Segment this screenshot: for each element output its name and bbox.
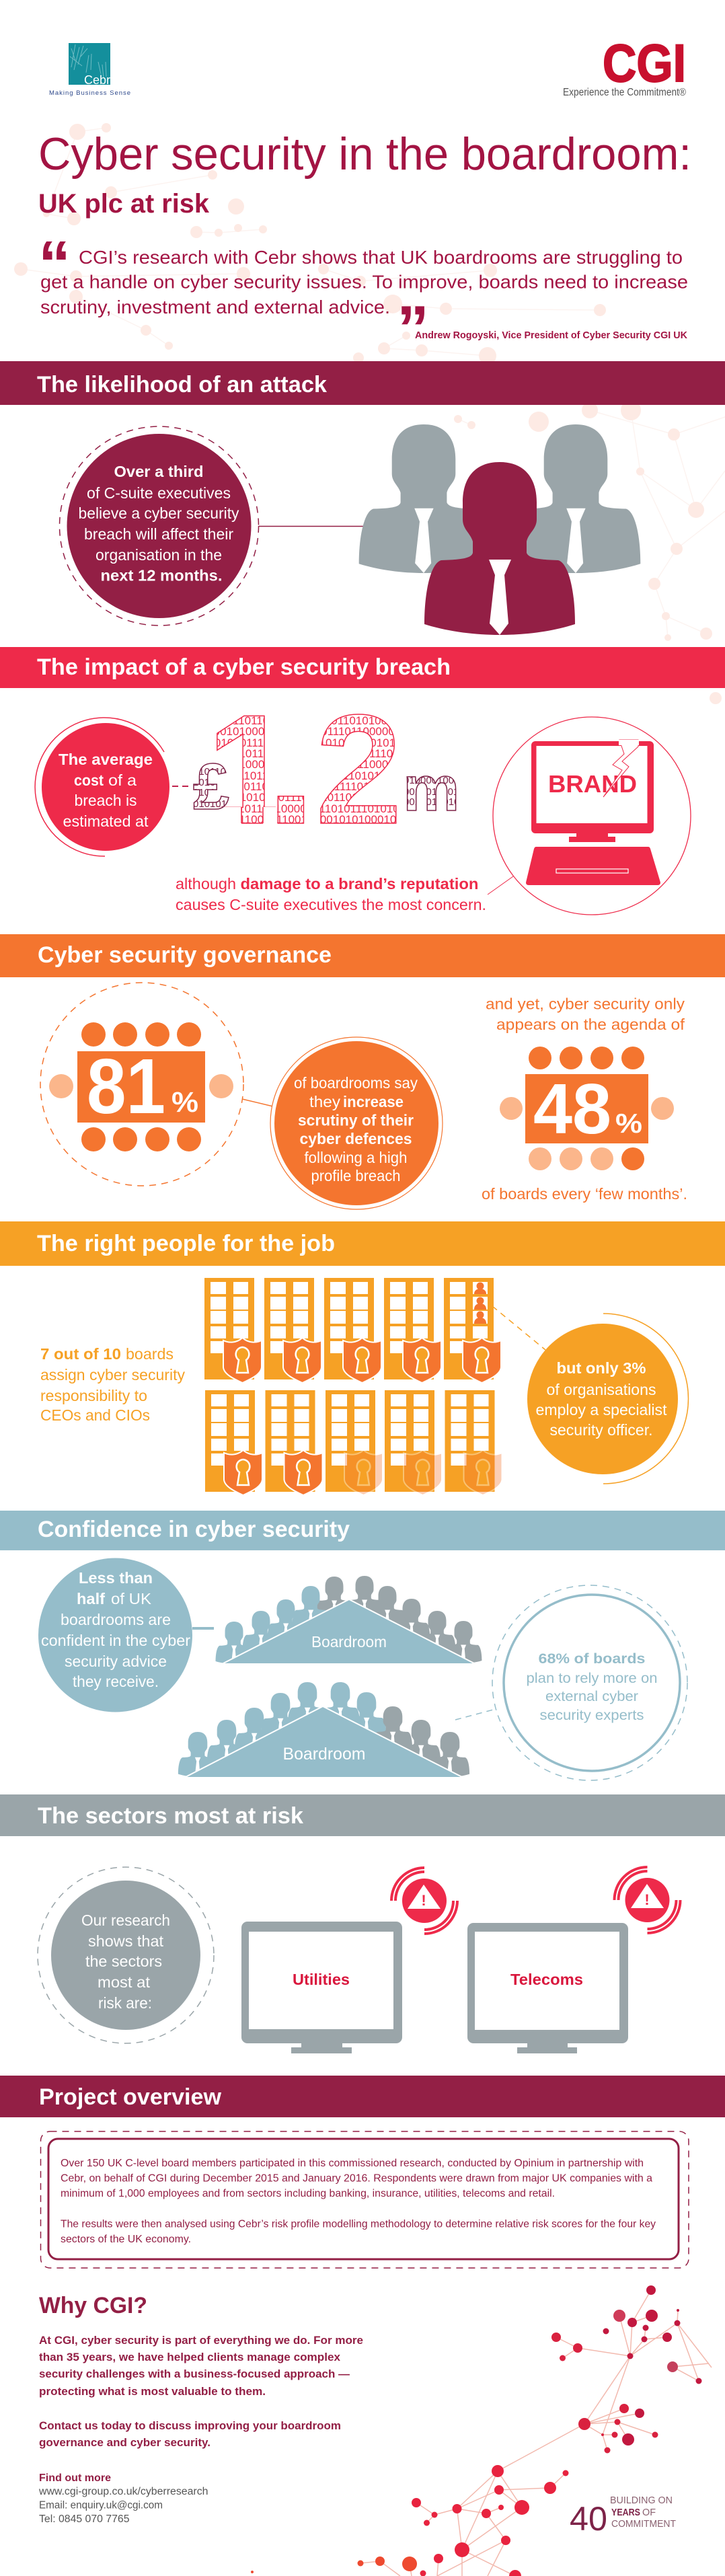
quote: “ (38, 228, 71, 300)
figure: £1.2m in binary: 011010101101101001010101110111001011100101110 (202, 747, 479, 760)
caption: brand reputation: damage to a brand’s reputation (241, 875, 479, 893)
callout: our research: most at (98, 1973, 151, 1991)
quote (38, 228, 688, 365)
text: 7 out of 10 boards (40, 1345, 185, 1424)
illustration: red network (251, 2285, 712, 2576)
text block: why CGI body: Contact us today to discuss improving your boardroom (39, 2420, 341, 2432)
callout: boardrooms increase scrutiny: scrutiny of their (298, 1111, 414, 1129)
section header: confidence (0, 1511, 725, 1550)
callout: our research: shows that (88, 1932, 164, 1950)
text: 7 out of 10 boards: assign cyber security (40, 1366, 185, 1384)
panel: project overview box (40, 2131, 689, 2268)
figure: £1.2m in binary: 1010011 (193, 777, 231, 788)
icon: alert telecoms: ! (644, 1891, 650, 1908)
callout: over a third (59, 426, 258, 626)
callout: boardrooms increase scrutiny: of boardrooms say (294, 1074, 418, 1092)
callout: boardrooms increase scrutiny: following a high (304, 1149, 408, 1166)
logo: Cebr (49, 43, 130, 97)
figure: £1.2m in binary: 2 (315, 683, 402, 857)
section header: likelihood (0, 361, 725, 405)
figure: £1.2m in binary: 0010010010010 (404, 796, 476, 808)
panel: governance (40, 983, 687, 1209)
heading: Why CGI: Why CGI? (39, 2293, 147, 2318)
callout: average cost: of a (108, 771, 137, 789)
figure: £1.2m in binary: 0100001000010 (404, 775, 476, 786)
callout: 68% of boards: 68% of boards (538, 1651, 646, 1667)
stat: 48%: of boards every ‘few months’. (482, 1185, 687, 1203)
logo: CGI (563, 33, 687, 98)
panel: project overview box: The results were then analysed using Cebr’s risk profile modelling methodology to determine relative risk scores for the four key (61, 2218, 656, 2230)
callout: less than half: confident in the cyber (41, 1632, 190, 1649)
section header: sectors (0, 1794, 725, 1836)
logo: CGI: Experience the Commitment® (563, 87, 687, 98)
text: 7 out of 10 boards: CEOs and CIOs (40, 1406, 150, 1424)
logo: building on 40 years of commitment (570, 2495, 676, 2538)
callout: less than half: boardrooms are (61, 1611, 171, 1628)
caption: brand reputation (176, 875, 486, 913)
section header: sectors: The sectors most at risk (38, 1803, 303, 1829)
monitor: utilities: Utilities (293, 1971, 350, 1988)
stat: 48%: and yet, cyber security only (486, 995, 685, 1013)
callout: over a third: believe a cyber security (78, 504, 239, 522)
panel: project overview box: minimum of 1,000 employees and from sectors including banking, insurance, utilities, telecoms and retail. (61, 2188, 555, 2199)
icon: broken brand monitor: BRAND (548, 770, 637, 798)
callout: 68% of boards: plan to rely more on (526, 1670, 658, 1686)
connector dash (172, 786, 190, 787)
text block: why CGI body: governance and cyber security. (39, 2437, 211, 2449)
section header: project overview: Project overview (39, 2084, 222, 2110)
figure: £1.2m in binary: £ (193, 750, 229, 823)
panel: sectors most at risk (38, 1867, 681, 2053)
figure: £1.2m in binary: 1 (206, 683, 293, 857)
figure: £1.2m in binary: 000100101001011100010110111011000101101110011 (202, 791, 480, 804)
figure: £1.2m in binary: 0101101 (193, 766, 231, 778)
quote: Andrew Rogoyski, Vice President of Cyber Security CGI UK (415, 330, 687, 341)
panel: likelihood of an attack (59, 424, 640, 635)
section header: right people: The right people for the job (37, 1231, 335, 1256)
callout: our research: risk are: (98, 1994, 152, 2012)
section header: project overview (0, 2076, 725, 2117)
callout: over a third: Over a third (114, 463, 203, 480)
text: 7 out of 10 boards: responsibility to (40, 1387, 147, 1404)
quote: CGI’s research with Cebr shows that UK boardrooms are struggling to (79, 247, 683, 268)
stat: 48%: appears on the agenda of (496, 1016, 685, 1033)
caption: brand reputation: although (176, 875, 236, 893)
caption: brand reputation: causes C-suite executives the most concern. (176, 896, 486, 913)
text block: why CGI body: security challenges with a business-focused approach — (39, 2368, 350, 2380)
figure: £1.2m in binary (193, 714, 456, 824)
connector line (259, 526, 367, 527)
panel: impact of a breach (34, 714, 691, 915)
callout: only 3% (527, 1314, 689, 1484)
text block: why CGI body (39, 2335, 363, 2449)
text block: contact details: www.cgi-group.co.uk/cyberresearch (38, 2486, 208, 2497)
callout: less than half: security advice (65, 1653, 167, 1670)
callout: only 3%: of organisations (546, 1381, 656, 1398)
callout: boardrooms increase scrutiny: profile breach (311, 1167, 401, 1184)
callout: only 3%: security officer. (550, 1421, 652, 1439)
text block: contact details: Tel: 0845 070 7765 (39, 2513, 129, 2525)
callout: our research: the sectors (85, 1953, 162, 1970)
boardroom table two: Boardroom (282, 1745, 366, 1764)
panel: confidence (38, 1558, 687, 1782)
icon: three executives (359, 424, 640, 635)
callout: average cost: cost (74, 771, 104, 789)
callout: only 3%: employ a specialist (535, 1401, 667, 1418)
panel: project overview box: Cebr, on behalf of CGI during December 2015 and January 2016. Respondents were drawn from major UK companies with a (61, 2172, 652, 2185)
panel: project overview box: Over 150 UK C-level board members participated in this commissioned research, conducted by Opinium in partnership with (61, 2158, 644, 2169)
callout: 68% of boards (492, 1585, 687, 1780)
logo: building on 40 years of commitment: 40 (570, 2500, 607, 2538)
figure: £1.2m in binary: 011010110010110010000101010001000010100010000 (202, 813, 486, 826)
quote: ” (397, 293, 429, 365)
figure: £1.2m in binary: . (266, 660, 316, 862)
monitor: telecoms (467, 1923, 628, 2053)
logo: building on 40 years of commitment: COMMITMENT (611, 2518, 676, 2530)
text block: contact details: Email: enquiry.uk@cgi.com (39, 2499, 163, 2511)
callout: over a third: breach will affect their (84, 525, 233, 543)
figure: £1.2m in binary: 0101011 (193, 798, 231, 810)
logo: Cebr: Cebr (84, 73, 110, 87)
icon: broken brand monitor (488, 717, 691, 915)
figure: £1.2m in binary: 000101100010011001010110111000100101100010110 (202, 758, 482, 771)
section header: impact: The impact of a cyber security breach (37, 654, 451, 680)
logo: building on 40 years of commitment: BUILDING ON (610, 2495, 673, 2506)
figure: £1.2m in binary: 100101011100101001110101001010100101011010100 (202, 736, 484, 749)
logo: building on 40 years of commitment: OF (642, 2507, 656, 2518)
callout: over a third: of C-suite executives (87, 484, 231, 502)
section header: governance (0, 934, 725, 977)
section header: right people (0, 1221, 725, 1266)
callout: less than half: half (77, 1590, 105, 1607)
quote: scrutiny, investment and external advice. (40, 297, 390, 317)
connector (242, 1099, 276, 1107)
text: 7 out of 10 boards: 7 out of 10 (40, 1345, 121, 1363)
figure: £1.2m in binary: 0010011001010 (404, 786, 475, 798)
section header: governance: Cyber security governance (38, 942, 332, 968)
callout: 68% of boards: external cyber (545, 1688, 638, 1704)
callout: less than half: Less than (79, 1569, 153, 1587)
section header: likelihood: The likelihood of an attack (37, 372, 327, 397)
icon: alert telecoms (615, 1867, 681, 1933)
subtitle: UK plc at risk (38, 189, 210, 219)
figure: £1.2m in binary: 101101101100110101101011010100101001101001011 (202, 714, 481, 727)
callout: less than half: of UK (111, 1590, 152, 1607)
callout: boardrooms increase scrutiny: increase (343, 1093, 404, 1110)
dashed connector (455, 1709, 496, 1720)
stat: 48% (482, 995, 687, 1203)
connector (192, 1627, 214, 1630)
callout: only 3%: but only 3% (557, 1359, 646, 1377)
callout: boardrooms increase scrutiny: they (309, 1093, 341, 1110)
logo: Cebr: Making Business Sense (49, 89, 130, 97)
text block: why CGI body: than 35 years, we have helped clients manage complex (39, 2351, 341, 2363)
callout: over a third: next 12 months. (101, 566, 222, 584)
stat: 48%: % (615, 1108, 642, 1139)
callout: less than half (38, 1558, 192, 1712)
callout: average cost: breach is (74, 792, 137, 809)
section header: impact (0, 647, 725, 688)
logo: CGI: CGI (603, 33, 686, 93)
icon: alert utilities: ! (421, 1892, 426, 1909)
boardroom table one (215, 1576, 482, 1668)
text block: why CGI body: At CGI, cyber security is part of everything we do. For more (39, 2335, 363, 2347)
callout: less than half: they receive. (73, 1673, 159, 1690)
panel: right people for the job (40, 1278, 689, 1495)
figure: £1.2m in binary: m (403, 753, 459, 825)
quote: get a handle on cyber security issues. To improve, boards need to increase (40, 272, 688, 292)
section header: confidence: Confidence in cyber security (38, 1517, 350, 1542)
callout: our research: Our research (81, 1911, 170, 1929)
text block: contact details: Find out more (39, 2472, 111, 2484)
figure: £1.2m in binary: 011011101101011011011111110111010110110111011 (202, 780, 471, 793)
figure: £1.2m in binary: 101110110111010110100101101010100110101110101 (202, 769, 480, 782)
text block: contact details (38, 2472, 208, 2525)
icon: alert utilities (391, 1868, 457, 1934)
boardroom table one: Boardroom (311, 1633, 387, 1651)
figure: £1.2m in binary: 101110101110100000011010111010101010110101110 (202, 802, 480, 815)
stat: 81%: % (171, 1086, 198, 1119)
monitor: telecoms: Telecoms (510, 1971, 583, 1988)
callout: average cost (35, 718, 169, 856)
callout: over a third: organisation in the (96, 546, 222, 564)
background network pattern (14, 123, 725, 704)
monitor: utilities (241, 1922, 402, 2053)
figure: £1.2m in binary: 010110101100101001011010110010100101101011001 (202, 704, 483, 716)
text block: why CGI body: protecting what is most valuable to them. (39, 2386, 266, 2398)
callout: boardrooms increase scrutiny: cyber defences (300, 1130, 412, 1147)
panel: project overview box: sectors of the UK economy. (61, 2234, 191, 2245)
title: Cyber security in the boardroom: (38, 128, 691, 180)
text: 7 out of 10 boards: boards (126, 1345, 174, 1363)
logo: building on 40 years of commitment: YEARS (611, 2507, 640, 2518)
callout: 68% of boards: security experts (539, 1707, 644, 1723)
callout: boardrooms increase scrutiny (270, 1037, 443, 1209)
stat: 81%: 81 (87, 1043, 165, 1130)
stat: 81% (40, 983, 243, 1186)
callout: average cost: The average (59, 751, 153, 768)
figure: £1.2m in binary: 110010100010110100001110110000010011010011010 (202, 725, 482, 738)
callout: our research (38, 1867, 214, 2043)
callout: average cost: estimated at (63, 812, 149, 830)
dashed connector (492, 1306, 545, 1350)
boardroom table two (175, 1682, 471, 1782)
figure: £1.2m in binary: 0100110 (193, 787, 231, 798)
icon grid: ten office buildings with shields (204, 1278, 502, 1495)
stat: 48%: 48 (533, 1069, 611, 1149)
